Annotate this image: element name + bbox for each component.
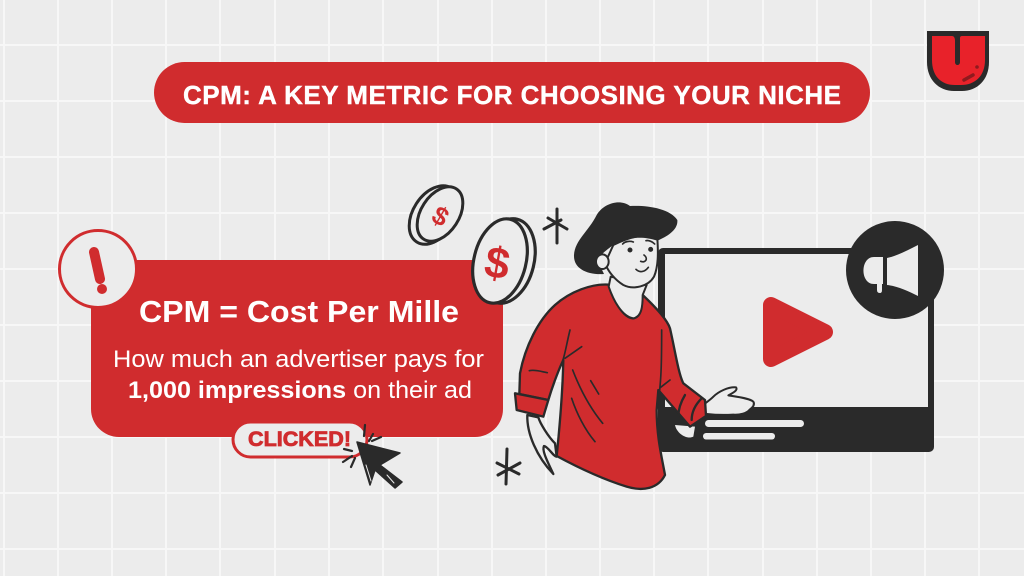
icon: small dollar coin: $ [427, 200, 455, 233]
person: sleeve cuff right [678, 395, 702, 420]
text: definition line two: 1,000 impressions on their ad [128, 377, 472, 404]
title banner [154, 62, 870, 123]
progress bar short [703, 433, 775, 440]
person: ear [596, 254, 609, 269]
person: face [605, 236, 658, 287]
progress bar long [705, 420, 804, 427]
icon: small dollar coin [399, 177, 472, 253]
person: lower left hand [527, 415, 557, 474]
person: right hand [695, 387, 754, 415]
title banner: CPM: A KEY METRIC FOR CHOOSING YOUR NICHE [183, 80, 841, 110]
heading: CPM = Cost Per Mille: CPM = Cost Per Mille [139, 294, 459, 329]
person: eyes and smile [623, 241, 655, 272]
person: hand on wrist blob [675, 425, 695, 438]
icon: play triangle [771, 305, 825, 359]
icon: large dollar coin: $ [481, 237, 514, 290]
person: shirt folds [529, 330, 670, 442]
icon: megaphone badge [846, 221, 944, 319]
person: hat [574, 202, 677, 274]
icon: brand logo shield [927, 31, 989, 91]
icon: clicked button: CLICKED! [248, 428, 351, 451]
icon: sparkle lower [497, 449, 520, 484]
icon: mouse cursor [343, 425, 402, 488]
text: definition line one: How much an advertiser pays for [113, 346, 484, 373]
icon: sparkle upper [544, 209, 567, 243]
icon: clicked button [233, 422, 367, 457]
icon: exclamation badge [60, 230, 136, 308]
panel: CPM definition [91, 260, 503, 437]
video player [658, 248, 934, 452]
person: rolled cuff [515, 393, 548, 417]
icon: large dollar coin [464, 213, 544, 309]
person: shirt [519, 285, 706, 489]
illustration: person [515, 202, 754, 489]
person: neck [609, 277, 647, 318]
video screen [665, 254, 928, 407]
